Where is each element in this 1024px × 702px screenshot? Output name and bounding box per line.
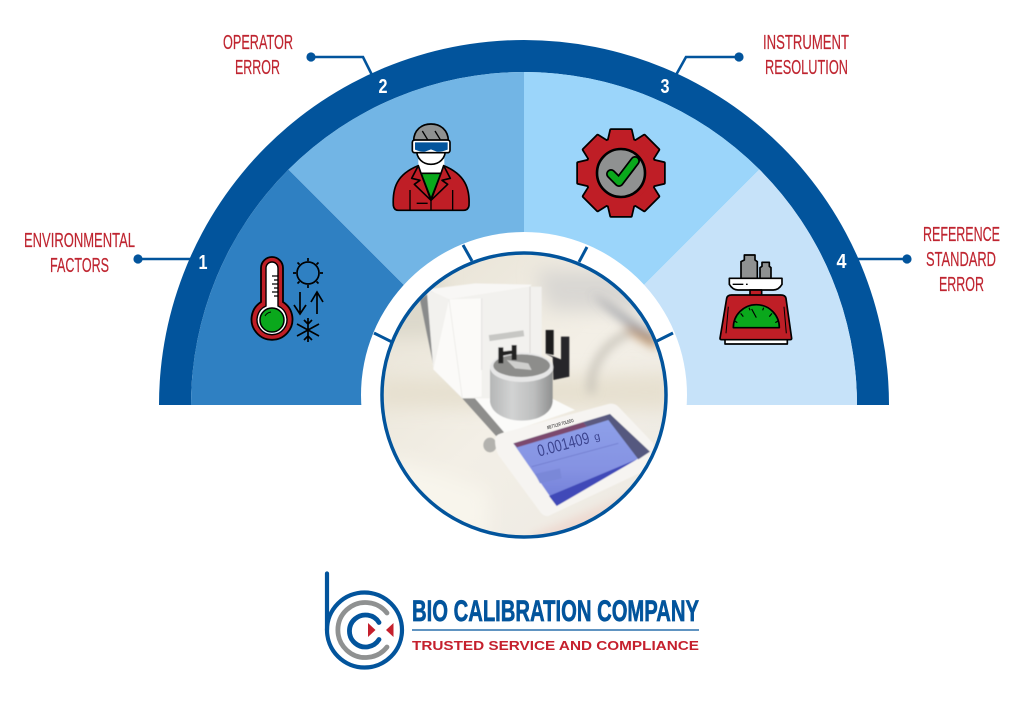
number 1: 1: [198, 252, 208, 274]
label: reference standard error: [923, 224, 1000, 296]
icon: operator with goggles and lab coat: [393, 124, 469, 210]
photo: precision balance with touch display: [384, 254, 664, 536]
sector 2: operator: [289, 72, 524, 405]
white hub: [361, 232, 687, 558]
number 3: 3: [660, 76, 670, 98]
label: reference standard error: ERROR: [939, 274, 984, 296]
connector: factor 4: [856, 254, 912, 264]
icon: thermometer with sun and snowflake: [251, 257, 323, 342]
logo tagline: TRUSTED SERVICE AND COMPLIANCE: [412, 638, 699, 653]
label: environmental factors: FACTORS: [50, 255, 109, 277]
label: instrument resolution: [763, 32, 849, 79]
outer gauge ring: [159, 40, 889, 405]
sector 3: instrument: [524, 72, 759, 405]
sector 1: environmental: [191, 170, 524, 405]
label: environmental factors: [24, 230, 135, 277]
icon: weighing scale with weights: [720, 255, 792, 344]
sector 4: reference: [524, 170, 857, 405]
logo mark: [327, 574, 402, 668]
label: instrument resolution: INSTRUMENT: [763, 32, 849, 54]
logo: bio calibration company: [327, 574, 699, 668]
photo: precision balance with touch display: g: [593, 430, 602, 444]
label: operator error: [223, 32, 293, 79]
display reading: 0.001409: [535, 428, 592, 461]
photo: precision balance with touch display: METTLER TOLEDO: [547, 418, 575, 431]
photo border: [382, 253, 666, 537]
connector: factor 3: [676, 52, 744, 75]
number 2: 2: [378, 76, 388, 98]
label: environmental factors: ENVIRONMENTAL: [24, 230, 135, 252]
label: operator error: ERROR: [235, 57, 280, 79]
number 4: 4: [836, 251, 847, 273]
ticks on hub: [374, 245, 673, 342]
label: operator error: OPERATOR: [223, 32, 293, 54]
connector: factor 1: [133, 254, 192, 264]
icon: gear with check mark: [578, 130, 664, 216]
logo name: BIO CALIBRATION COMPANY: [412, 595, 699, 628]
label: instrument resolution: RESOLUTION: [765, 57, 848, 79]
connector: factor 2: [306, 52, 372, 75]
